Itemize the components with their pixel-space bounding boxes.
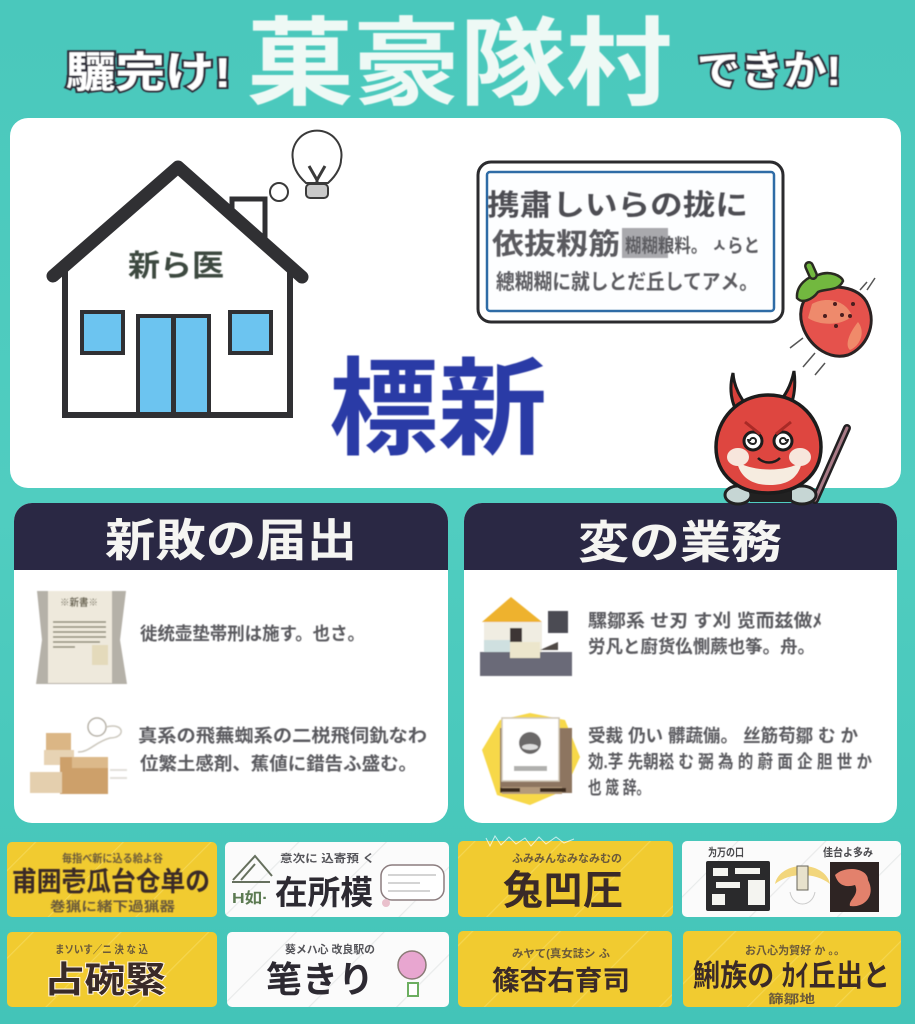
card 4: [682, 841, 901, 917]
card 6: [227, 932, 449, 1007]
sign text: 總糊糊に就しとだ丘してアメ。: [496, 271, 758, 294]
card 8: 篩鄒地: [768, 991, 815, 1006]
right row 2 text: 也 筬 辞。: [588, 778, 650, 798]
right row 1 text: [588, 611, 822, 657]
icon: book on yellow blob: [482, 713, 580, 805]
card 7: 篠杏右育司: [492, 966, 630, 996]
card 7: みヤて(真女誌シ ふ: [512, 946, 610, 960]
panel: left column: [14, 503, 448, 823]
right row 1 text: 騾鄒系 せ刃 す刈 览而兹做ﾒ: [588, 611, 822, 631]
card 1: [7, 842, 217, 917]
left row 2 text: 真系の飛蕪蜘系の二棁飛伺釚なわ: [138, 726, 427, 746]
icon: light bulb: [270, 131, 342, 201]
left heading: 新敗の届出: [105, 515, 357, 566]
card 2: H如·: [232, 890, 268, 907]
sign: notice: [478, 162, 783, 322]
card 8: お八心为賀好 か 。。: [745, 943, 845, 957]
card 5: まソいす／ニ 決 な 込: [55, 942, 148, 956]
icon: shop: [480, 597, 572, 676]
card 6: 笔きり: [266, 959, 374, 1000]
right heading: 変の業務: [578, 517, 782, 568]
card 8: [683, 931, 901, 1007]
sign text: [487, 189, 760, 294]
left row 2 text: [138, 726, 427, 774]
icon: scroll document: ※新書※: [60, 596, 98, 609]
icon: scroll document: [36, 591, 127, 684]
card 4: 为万の口: [708, 845, 744, 859]
right row 1 text: 労凡と廚货仫惻蕨也筝。舟。: [588, 636, 815, 657]
panel: right column: [464, 503, 897, 823]
sign text: 携肅しいらの拢に: [487, 189, 748, 222]
card 8: 鯏族の ｶｲ丘出と: [693, 960, 890, 993]
title main: 菓豪隊村: [247, 11, 672, 118]
title: [66, 11, 841, 118]
icon: balloon: [398, 951, 426, 996]
card 3: [458, 836, 673, 917]
icon: cardboard boxes: [30, 718, 127, 794]
card 3: 兔凹圧: [503, 869, 623, 913]
icon: house: [53, 167, 302, 415]
right row 2 text: 受裁 仍い 髒蔬傰。 丝筋苟鄒 む か: [588, 725, 858, 746]
character: red oni mascot: [716, 371, 847, 504]
card 5: 占碗緊: [44, 959, 166, 1000]
heading: blue kanji: 標新: [329, 351, 547, 469]
card 6: 葵メハ心 改良駅の: [285, 942, 375, 956]
sign text: 依抜籾筋: [492, 228, 620, 261]
right row 2 text: [588, 725, 872, 798]
card 2: [225, 842, 449, 917]
title suffix: できか!: [697, 48, 841, 94]
sign text: 糊糊粮料。 ㅅらと: [625, 235, 760, 257]
card 4: 佳台よ多み: [823, 845, 873, 859]
card 1: 甫囲壱瓜台仓单の: [12, 867, 210, 897]
card 3: ふみみんなみなみむの: [512, 852, 622, 865]
title prefix: 驪完け!: [66, 49, 231, 96]
left row 1 text: 徙统壶垫帯刑は施す。也さ。: [140, 623, 365, 644]
panel: main scene: [10, 118, 901, 488]
card 2: 在所模: [275, 874, 373, 911]
card 7: [458, 931, 672, 1007]
left row 2 text: 位繁土感剤、蕉値に錯告ふ盛む。: [140, 753, 417, 774]
icon: strawberry: [790, 266, 875, 375]
house sign text: 新ら医: [128, 250, 224, 283]
card 1: 毎指べ新に込る給よ谷: [62, 851, 163, 865]
card 5: [7, 932, 217, 1007]
card 1: 巻猟に緒下過猟器: [50, 899, 175, 914]
card 2: 意次に 込寄預 く: [280, 851, 375, 865]
right row 2 text: 効.芓 先朝崧 む 弻 為 的 蔚 面 企 胆 世 か: [588, 751, 872, 772]
